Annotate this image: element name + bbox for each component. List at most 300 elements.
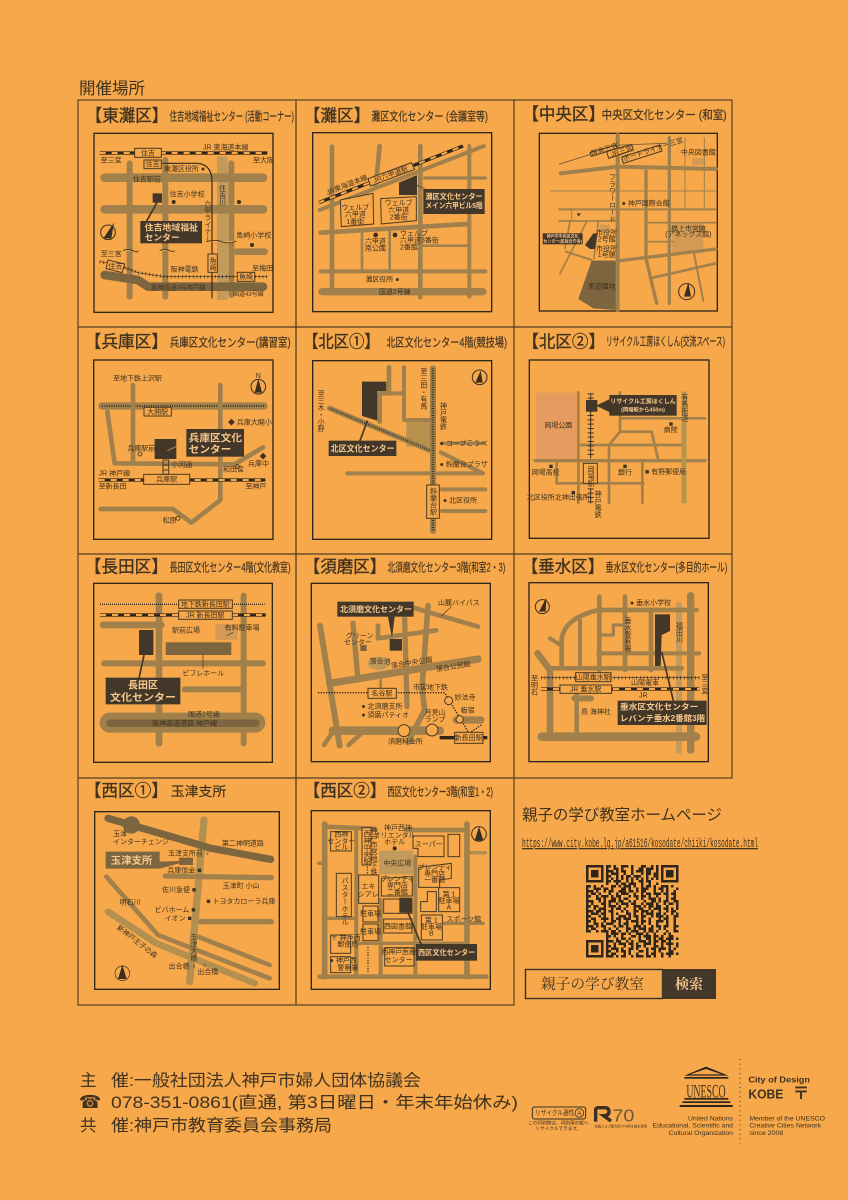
map labels: 福田川 — [675, 621, 683, 643]
map labels: ● 神戸国際会館 — [622, 199, 670, 208]
map roads — [320, 606, 481, 746]
JR Kobe line — [99, 475, 265, 485]
central plaza — [379, 851, 413, 874]
JR Tokaido line — [100, 148, 267, 158]
map labels — [101, 142, 274, 298]
map labels: ランプ — [425, 716, 445, 724]
map frame — [313, 133, 492, 312]
callout: Nada cultural centre: メイン六甲ビル5階 — [425, 200, 483, 210]
map roads — [330, 367, 485, 511]
compass — [535, 598, 549, 614]
footer: organizer and contact — [79, 1071, 518, 1135]
map labels: スポーツ館 — [446, 915, 481, 924]
park — [536, 393, 577, 459]
recycle marks — [528, 1059, 825, 1143]
map labels: 第二神明道路 — [222, 838, 264, 847]
map labels: 明石川 — [120, 899, 141, 907]
map labels — [317, 367, 488, 516]
map labels: 市役所 — [596, 244, 617, 253]
map labels: B — [429, 931, 434, 938]
map labels: (アネックス館) — [665, 230, 712, 239]
map labels: フラワーロード — [608, 173, 616, 222]
map labels: 西神戸医療 — [381, 947, 416, 956]
map labels: ウェルブ — [400, 228, 428, 237]
map labels — [344, 598, 483, 745]
station box — [583, 463, 597, 483]
map labels — [527, 392, 688, 519]
callout: Nagata cultural centre: 長田区 — [128, 679, 158, 691]
map labels: 松原 — [163, 515, 177, 524]
map labels: 1号館 — [598, 250, 616, 259]
compass — [679, 282, 695, 300]
map labels — [113, 830, 275, 976]
map labels: 玉津 — [113, 830, 127, 838]
map roads — [319, 824, 486, 977]
map labels: 山麓バイパス — [438, 598, 480, 607]
map labels — [99, 373, 272, 524]
map labels: JR — [639, 692, 648, 699]
map labels: 有馬街道 — [681, 392, 688, 422]
map labels: 病院 — [664, 425, 678, 434]
map labels: 山陽垂水駅 — [576, 672, 611, 681]
map labels: 市役所 — [596, 228, 617, 237]
homepage heading: 親子の学び教室ホームページ — [522, 806, 722, 824]
map labels: 魚崎 — [209, 256, 217, 271]
map labels: 魚崎 — [239, 272, 253, 281]
map labels: 北区役所北神出張所 — [527, 492, 590, 501]
map labels: 至新長田 — [99, 482, 127, 491]
map labels: 阪神電鉄 — [171, 265, 199, 274]
map labels: 2号館 — [598, 235, 616, 244]
map labels: 橋上市営館 — [671, 224, 706, 233]
map labels: 銀行 — [618, 467, 632, 476]
compass: N — [256, 373, 261, 380]
map labels: JR東海道本線 — [325, 173, 369, 197]
map labels: 妙法寺 — [455, 692, 476, 701]
heading: Higashinada: 【東灘区】 — [86, 106, 168, 126]
map labels: ● 鈴蘭台プラザ — [440, 460, 488, 469]
map labels — [577, 135, 716, 290]
map labels: 大開駅 — [147, 407, 168, 416]
recycling suitability mark A — [528, 1107, 589, 1132]
map labels: ◆ 兵庫大開小 — [228, 417, 272, 426]
map labels: ♀ — [202, 962, 207, 969]
map labels: ● 須磨パティオ — [361, 710, 409, 719]
callout: Hyogo cultural centre: センター — [189, 444, 231, 456]
JR line — [541, 684, 699, 694]
callout: Nishi cultural centre: 西区文化センター — [418, 948, 475, 957]
map labels: 至神戸 — [245, 482, 266, 491]
footer: organizer and contact: 催:神戸市教育委員会事務局 — [111, 1116, 332, 1135]
callout: Hyogo cultural centre — [186, 429, 244, 457]
map labels: 魚崎小学校 — [236, 231, 271, 240]
map frame — [95, 812, 279, 989]
UNESCO logo: UNESCO — [686, 1082, 726, 1103]
callout: Recycle workshop — [609, 395, 677, 416]
map roads — [538, 596, 699, 751]
map labels: 駐車場 — [439, 896, 459, 905]
heading: Nagata: 【長田区】 — [85, 556, 168, 576]
R70 mark: 70 — [612, 1106, 634, 1126]
heading: Tarumi: 【垂水区】 — [522, 556, 604, 576]
callout: Tamatsu branch: 玉津支所 — [111, 854, 152, 867]
map labels: 出合橋 — [197, 967, 218, 976]
map labels: 六甲道 — [365, 236, 386, 245]
map labels: 二番館 — [387, 887, 408, 896]
building markers — [360, 639, 402, 651]
venue name: 北須磨文化センター3階(和室2・3) — [387, 561, 505, 575]
map labels: 神戸西神 — [384, 823, 412, 832]
pointer — [412, 183, 425, 189]
pointer — [146, 202, 157, 222]
map labels: 専門店 — [424, 869, 445, 878]
pointer — [167, 442, 186, 451]
map labels: パスターホテル — [341, 877, 349, 926]
map labels: 阪急三宮 — [590, 141, 619, 158]
map labels: 東灘区役所 ● — [164, 164, 205, 173]
map labels: 六甲道 — [345, 210, 366, 219]
callout: Chuo cultural centre: センター(区総合庁舎) — [543, 238, 583, 244]
hatched area — [406, 422, 431, 447]
map frame — [311, 811, 490, 989]
map labels: ■ 有野郵便局 — [645, 467, 686, 476]
map labels: JR 東海道本線 — [203, 142, 248, 151]
map labels: 落合公民館 — [435, 659, 471, 674]
subway line — [318, 693, 481, 732]
heading: Kita 1: 【北区①】 — [303, 331, 380, 351]
JR Tokaido line — [319, 146, 463, 203]
footer: organizer and contact: ☎ — [79, 1092, 101, 1113]
homepage panel — [522, 806, 758, 999]
UNESCO caption — [653, 1115, 734, 1137]
callout: Nishi cultural centre — [416, 944, 477, 961]
map roads — [101, 385, 264, 523]
panel: Nagata ward — [78, 554, 296, 778]
callout: Sumiyoshi welfare centre: 住吉地域福祉 — [145, 223, 199, 233]
map labels: 第 1 — [443, 890, 456, 899]
callout: Kita cultural centre: 北区文化センター — [331, 444, 395, 454]
map labels — [152, 600, 260, 728]
pond — [368, 657, 390, 670]
map roads — [320, 146, 485, 297]
map labels: 岡場公園 — [544, 421, 572, 430]
map labels: 至三木・小野 — [317, 390, 325, 432]
map labels: 住吉 — [146, 160, 160, 169]
map labels: ウェルブ — [341, 202, 369, 211]
map labels: 駐車場 — [421, 922, 442, 931]
heading: Chuo: 【中央区】 — [522, 104, 605, 124]
map labels: プレンティ — [417, 863, 452, 871]
footer: organizer and contact: 催:一般社団法人神戸市婦人団体協議会 — [111, 1071, 421, 1090]
map labels: センター — [344, 637, 372, 646]
recycling suitability mark A: リサイクル適性 — [535, 1108, 575, 1117]
Kobe Electric Railway — [424, 368, 442, 531]
callout: Sumiyoshi welfare centre — [140, 221, 202, 243]
map labels: 灘区役所 ● — [365, 274, 399, 283]
map labels: 山陽電車 — [631, 678, 659, 687]
callout: Chuo cultural centre — [543, 233, 583, 244]
map labels: ホテル — [384, 838, 405, 846]
map labels — [530, 598, 708, 716]
map labels: 至三宮 — [101, 156, 122, 165]
map labels: 有料駐車場 — [225, 623, 260, 632]
map labels: 神戸電鉄 — [439, 401, 447, 431]
building marker — [179, 858, 193, 865]
map labels: ● 垂水小学校 — [630, 598, 671, 607]
station boxes — [144, 407, 190, 484]
map labels: 岡場駅 — [587, 466, 595, 488]
venue name: 住吉地域福祉センター (活動コーナー) — [170, 109, 294, 124]
heading: Nishi 2: 【西区②】 — [304, 781, 386, 801]
UNESCO network caption: Creative Cities Network — [749, 1123, 822, 1130]
City of Design Kobe logo: City of Design — [748, 1074, 810, 1084]
Sanyo railway — [541, 677, 699, 679]
panel: Kita ward 2 — [514, 327, 732, 554]
compass — [472, 827, 486, 841]
callout: Chuo cultural centre: 神戸市中央区文化 — [547, 233, 579, 239]
map labels: JR 垂水駅 — [570, 684, 601, 693]
map labels: 住吉 — [108, 262, 122, 271]
compass — [101, 223, 115, 240]
map labels: 佐川急便 ■ — [162, 885, 196, 894]
UNESCO caption: Educational, Scientific and — [653, 1123, 733, 1130]
venue name: 灘区文化センター (会議室等) — [371, 109, 488, 124]
map labels: 兵庫中 — [248, 459, 269, 468]
map labels: 東遊園地 — [588, 281, 616, 290]
UNESCO caption: Cultural Organization — [669, 1130, 733, 1137]
map labels: 岡場高校 — [532, 467, 560, 476]
map labels: ウェルブ — [385, 198, 413, 207]
map labels — [325, 173, 439, 296]
compass — [251, 373, 266, 394]
map labels: 西神 — [334, 830, 348, 839]
station box — [427, 485, 439, 518]
map labels: イオン ■ — [165, 915, 192, 923]
map labels: 阪神高速道路 神戸線 — [152, 719, 217, 728]
map labels: 神戸市営地下鉄 — [370, 826, 378, 877]
City of Design Kobe logo — [748, 1074, 810, 1103]
building marker — [399, 898, 412, 913]
map labels: エキ — [361, 883, 375, 890]
map labels: 2番館 — [400, 242, 418, 251]
search box: 親子の学び教室 — [541, 975, 644, 993]
R70 mark: 古紙パルプ配合率70%再生紙を使用 — [594, 1123, 647, 1128]
map labels: 落合池 — [370, 657, 391, 666]
map labels: 兵庫信金 ■ — [167, 865, 201, 874]
callout: Recycle workshop: リサイクル工房ほくしん — [610, 398, 676, 406]
map labels: 至明石 — [530, 674, 538, 696]
venue name: 兵庫区文化センター(講習室) — [170, 336, 291, 350]
map labels: 六甲ライナー — [204, 199, 211, 242]
footer: organizer and contact: 共 — [80, 1116, 96, 1135]
map labels: 警察署 — [337, 963, 358, 972]
callout: Recycle workshop: (岡場駅から450m) — [621, 406, 665, 414]
panel: Nada ward — [296, 100, 514, 327]
map labels: 専門店 — [387, 881, 408, 890]
JR line — [100, 610, 266, 620]
map labels: 六甲道3番街 — [400, 236, 439, 245]
callout: Tarumi cultural centre: レバンテ垂水2番館3階 — [620, 713, 705, 723]
heading: Nada: 【灘区】 — [304, 106, 370, 126]
UNESCO network caption: Member of the UNESCO — [749, 1115, 825, 1122]
map frame — [94, 133, 273, 312]
building marker — [655, 614, 670, 666]
map labels: 住吉 — [141, 148, 155, 157]
map labels: 1番街 — [346, 217, 364, 226]
panel: Suma ward — [296, 554, 514, 778]
dotted divider — [738, 1059, 741, 1143]
building marker — [399, 175, 417, 195]
map labels: 兵庫駅前 — [127, 443, 155, 452]
map labels: 駐車場 — [360, 927, 381, 936]
building marker — [155, 439, 176, 459]
station boxes — [106, 148, 255, 281]
map labels: 玉津大橋 — [190, 933, 197, 962]
map labels: 2番街 — [390, 213, 408, 222]
footer: organizer and contact: 主 — [80, 1071, 96, 1090]
heading: Suma: 【須磨区】 — [304, 556, 386, 576]
panel: Nishi ward 2 — [296, 778, 514, 1005]
station boxes — [590, 144, 662, 163]
map labels: 神戸電鉄 — [594, 489, 602, 519]
building marker — [153, 193, 162, 203]
map labels: 市営地下鉄 — [413, 682, 448, 691]
map roads — [106, 816, 271, 983]
blocks — [166, 624, 237, 655]
map labels: 国道43号線 — [233, 290, 264, 298]
map frame — [529, 583, 708, 762]
search box — [526, 969, 716, 999]
building marker — [362, 382, 386, 421]
callout: Hyogo cultural centre: 兵庫区文化 — [189, 431, 243, 444]
map labels: 一番館 — [424, 875, 445, 884]
callout: Tarumi cultural centre: 垂水区文化センター — [620, 702, 698, 712]
building boxes — [340, 193, 416, 227]
map labels: 至地下鉄上沢駅 — [113, 373, 162, 382]
map labels: 地下鉄新長田駅 — [181, 600, 230, 609]
map labels: 〒 神戸西 — [331, 933, 361, 942]
map labels: 住吉駅前 — [133, 174, 161, 183]
map labels: JR 新長田駅 — [186, 611, 225, 620]
map labels: 西神中央駅 — [363, 830, 371, 866]
map roads — [551, 135, 716, 310]
map frame — [529, 360, 709, 538]
map labels: 垂水警察署 — [624, 616, 632, 653]
map labels: A — [447, 905, 452, 912]
building marker — [585, 233, 597, 249]
heading: Kita 2: 【北区②】 — [522, 331, 605, 351]
compass — [472, 370, 487, 385]
map labels: 小河通 — [171, 460, 192, 469]
map frame — [94, 583, 272, 762]
map labels: 至三宮 — [101, 249, 122, 258]
callout: Sumiyoshi welfare centre: センター — [145, 233, 180, 243]
panel: Nishi ward 1 — [78, 778, 296, 1005]
map labels: ● コープこうべ — [440, 440, 487, 448]
building marker — [139, 630, 153, 655]
map labels: 南公園 — [365, 244, 386, 253]
map labels: 須磨料金所 — [388, 736, 423, 745]
panel: Tarumi ward — [514, 554, 732, 778]
building marker — [586, 399, 610, 412]
City of Design Kobe logo: 〒 — [792, 1083, 810, 1103]
map labels — [327, 823, 481, 972]
map labels: JR三宮 — [610, 143, 634, 159]
UNESCO caption: United Nations — [688, 1115, 734, 1122]
map labels: 国道2号線 — [379, 287, 411, 296]
map labels: 新長田駅 — [455, 733, 483, 742]
UNESCO network caption: since 2008 — [749, 1130, 784, 1137]
panel: Kita ward 1 — [296, 327, 514, 554]
callout: Kita-Suma cultural centre: 北須磨文化センター — [340, 604, 412, 614]
UNESCO logo — [680, 1067, 733, 1107]
venue name: 北区文化センター4階(競技場) — [386, 336, 507, 350]
heading: Nishi 1: 【西区①】 — [85, 781, 168, 801]
map labels: 出合橋 ♀ — [169, 961, 197, 970]
map labels: 至三宮 — [701, 673, 708, 695]
pointer — [360, 421, 367, 442]
map labels: 第 1 — [425, 916, 438, 925]
map labels: ビル — [334, 842, 348, 851]
callout: Nada cultural centre — [423, 189, 485, 214]
railway — [589, 393, 592, 503]
map labels: 至大阪 — [253, 156, 274, 165]
map labels: ■ トヨタカローラ兵庫 — [206, 896, 275, 905]
park and light blocks — [578, 158, 704, 310]
map labels: 西図書館 — [384, 921, 412, 930]
station boxes — [560, 673, 612, 693]
map labels: 郵便局 — [337, 940, 358, 949]
footer: organizer and contact: 078-351-0861(直通, 第3日曜日・年末年始休み) — [111, 1093, 518, 1112]
map labels: ポートライナー三宮 — [622, 135, 684, 163]
map labels: 名谷駅 — [372, 689, 392, 698]
venue name: 西区文化センター3階(和室1・2) — [387, 785, 493, 799]
callout: Kita-Suma cultural centre — [337, 602, 414, 617]
R70 mark — [594, 1106, 647, 1128]
map labels: シアレ — [358, 891, 379, 899]
venue name: 玉津支所 — [171, 784, 226, 799]
callout: Nagata cultural centre: 文化センター — [110, 691, 176, 704]
map roads — [100, 596, 265, 743]
map labels: 玉津支所前 ♀ — [168, 848, 210, 857]
map roads — [535, 392, 705, 503]
map labels: ビバホーム ■ — [155, 905, 196, 914]
map labels: 中央図書館 — [681, 147, 716, 156]
map labels: ビフレホール — [182, 668, 224, 677]
heading: Hyogo: 【兵庫区】 — [85, 331, 168, 351]
map labels: ● 北須磨支所 — [361, 702, 402, 711]
map labels: インターチェンジ — [113, 837, 169, 846]
venue name: 垂水区文化センター(多目的ホール) — [606, 560, 727, 575]
QR code — [586, 866, 678, 956]
map labels: グリーン — [346, 631, 373, 640]
map labels: 新神戸王子の森 — [115, 923, 159, 960]
map labels: ● 北区役所 — [443, 496, 477, 505]
station boxes — [179, 600, 232, 619]
search box: 検索 — [675, 976, 703, 993]
map labels: ● 神戸西 — [330, 956, 357, 965]
map labels: 阪神高速3号神戸線 — [151, 283, 206, 292]
map labels: 月見山 — [425, 708, 446, 716]
recycling suitability mark A: この印刷物は、印刷用の紙へ — [528, 1119, 589, 1126]
venue name: リサイクル工房ほくしん(交流スペース) — [606, 335, 725, 349]
subway line — [100, 602, 265, 606]
map frame — [311, 583, 490, 762]
callout: Tarumi cultural centre — [618, 701, 707, 725]
map labels: プレンティ — [380, 875, 415, 883]
callout: Nada cultural centre: 灘区文化センター — [425, 191, 483, 201]
pointer — [406, 908, 421, 945]
